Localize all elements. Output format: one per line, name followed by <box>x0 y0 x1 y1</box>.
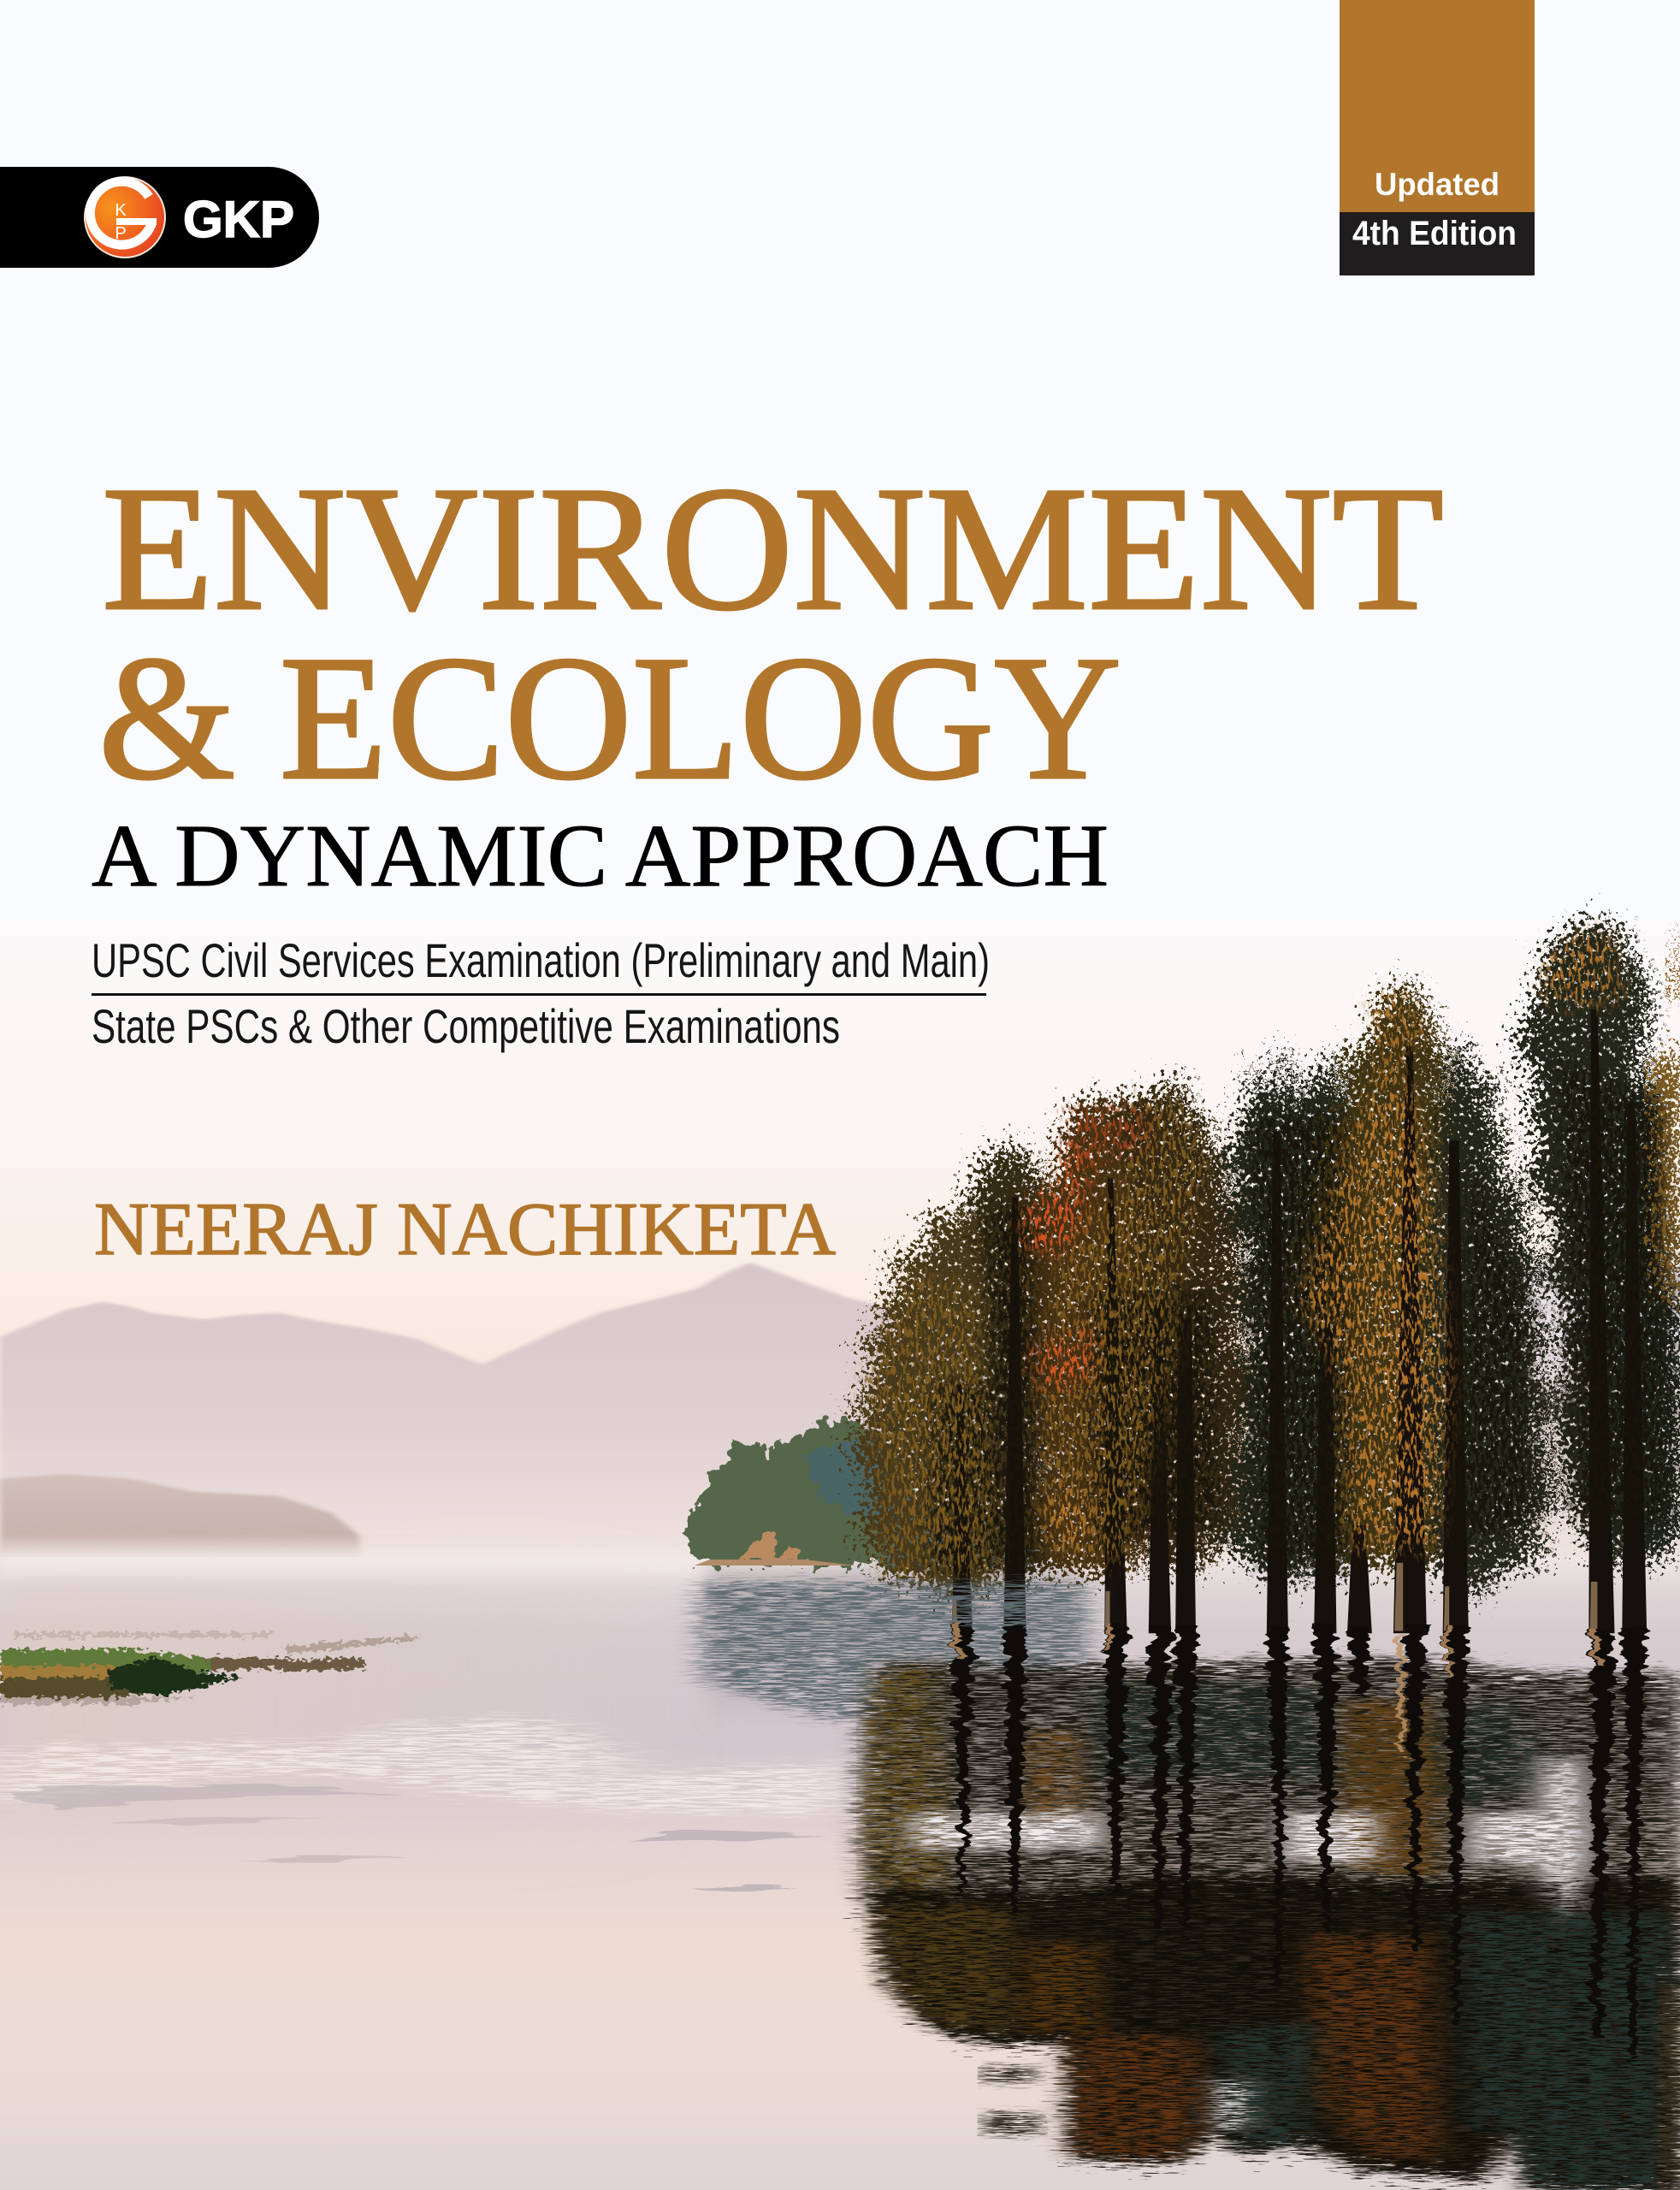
reflection: olive left mass <box>865 1661 951 1914</box>
updated label: Updated <box>1375 167 1500 202</box>
foliage highlights: orange <box>1048 929 1628 1548</box>
edition tag <box>1340 0 1535 275</box>
crown: right edge tree <box>1649 1047 1680 1310</box>
warm water tint on the left <box>0 1583 684 1822</box>
crown: dark tree behind large tree <box>1429 1045 1558 1595</box>
exam line one: UPSC Civil Services Examination (Preliminary and Main) <box>92 933 990 987</box>
reflection: dense lower foliage <box>871 1873 1680 2190</box>
crown: tree four <box>1128 1082 1251 1566</box>
right sky haze <box>1198 1266 1680 1574</box>
reflection: red-brown lower masses <box>1074 1935 1445 2158</box>
reflection: olive-brown left lower <box>876 1906 1020 2033</box>
reflection: isolated foliage specks <box>983 2067 1042 2135</box>
reflection: brown column <box>1343 1697 1447 1878</box>
reflection: solid lower base <box>871 1881 1680 2190</box>
crown: tree beside tall tree <box>1612 1084 1680 1567</box>
crown: tree five <box>1225 1051 1316 1582</box>
tree trunks <box>952 1009 1647 1633</box>
foliage highlights: olive brown <box>871 1093 1214 1572</box>
exam line two: State PSCs & Other Competitive Examinations <box>92 999 840 1053</box>
paper background <box>0 0 1680 924</box>
island with trees <box>687 1418 1044 1566</box>
subtitle: A DYNAMIC APPROACH <box>92 807 1109 905</box>
crown: tall tree with orange top <box>1520 925 1649 1563</box>
crown: right edge tree top <box>1668 925 1680 1004</box>
foliage highlights: red <box>1026 1145 1102 1394</box>
crown: tree six <box>1300 1066 1364 1572</box>
sunlit trunk sides <box>953 1563 1597 1631</box>
crown: large brown tree <box>1298 986 1466 1563</box>
reflection: dark green right masses <box>1214 1914 1680 2190</box>
foliage highlights: dark red top <box>1069 1108 1155 1155</box>
reflection: grey island streaks <box>704 1582 1091 1723</box>
reflected sunlit trunks <box>953 1625 1600 1755</box>
distant mountains <box>0 1263 1680 1561</box>
reflection: far right brown <box>1659 1986 1680 2190</box>
grey island reflection near shore <box>706 1567 1082 1730</box>
reflected trunks <box>952 1625 1647 2057</box>
title line one: ENVIRONMENT <box>102 450 1444 647</box>
crown: tree three <box>1024 1103 1171 1572</box>
reflection: dark green streaks <box>1096 1683 1553 1805</box>
crown: tree two <box>967 1150 1058 1582</box>
low hill on the left <box>0 1474 362 1560</box>
publisher name: GKP <box>183 191 294 248</box>
water ripples and cloud reflections <box>0 1718 857 1894</box>
edition label: 4th Edition <box>1352 215 1517 252</box>
tree reflection in the water <box>704 1582 1680 2190</box>
tree grove <box>855 925 1680 1633</box>
title line two: & ECOLOGY <box>98 619 1121 816</box>
crown: tree one <box>855 1216 1020 1595</box>
icon: GKP emblem <box>84 176 166 258</box>
reflection: brown mid patch <box>1020 1942 1107 2033</box>
divider rule <box>92 993 986 996</box>
icon: GKP emblem: K <box>115 201 127 220</box>
water <box>0 1557 1680 2190</box>
foliage shadows <box>930 1057 1676 1572</box>
reflection: bright gaps <box>914 1755 1595 2129</box>
publisher logo badge <box>0 167 319 268</box>
icon: GKP emblem: P <box>115 224 127 243</box>
sky <box>0 920 1680 1570</box>
mist on horizon <box>0 1550 701 1572</box>
reflection: upper foliage streaks <box>865 1658 1680 1899</box>
reflection: soft mid-tone under upper foliage <box>865 1665 1680 1899</box>
grassy islet <box>0 1632 419 1704</box>
reflection: brown patch <box>1026 1730 1091 1820</box>
author name: NEERAJ NACHIKETA <box>94 1188 836 1271</box>
